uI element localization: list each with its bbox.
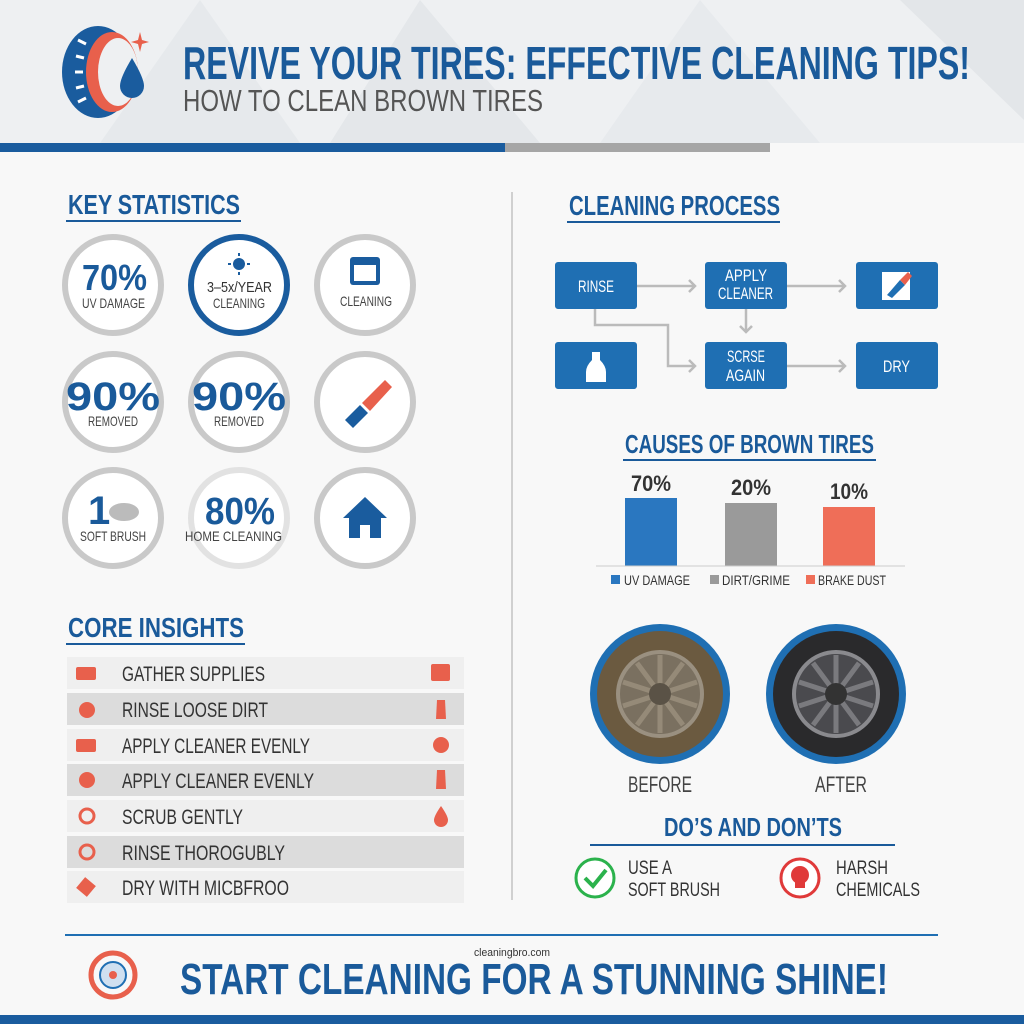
- flowchart: cleaning process: [555, 262, 938, 389]
- don't: harsh chemicals: [781, 858, 920, 901]
- panel: statistics circles: REMOVED: [88, 413, 138, 429]
- bar chart: causes: 70%: [631, 471, 671, 496]
- tire: after: AFTER: [815, 772, 867, 797]
- flowchart: cleaning process: APPLY: [725, 266, 767, 285]
- do: soft brush: [576, 858, 720, 901]
- legend: BRAKE DUST: [818, 572, 886, 588]
- panel: statistics circles: CLEANING: [213, 295, 265, 311]
- panel: insights list: SCRUB GENTLY: [122, 806, 243, 829]
- heading: do's and don'ts: DO’S AND DON’TS: [664, 812, 842, 842]
- don't: harsh chemicals: HARSH: [836, 858, 888, 879]
- panel: statistics circles: [65, 237, 413, 566]
- bar chart: causes: 20%: [731, 475, 771, 500]
- panel: statistics circles: UV DAMAGE: [82, 295, 145, 311]
- don't: harsh chemicals: CHEMICALS: [836, 880, 920, 901]
- panel: statistics circles: 80%: [205, 491, 275, 533]
- panel: statistics circles: HOME CLEANING: [185, 528, 282, 544]
- panel: insights list: DRY WITH MICBFROO: [122, 877, 289, 900]
- do: soft brush: SOFT BRUSH: [628, 880, 720, 901]
- panel: statistics circles: 3–5x/YEAR: [207, 279, 272, 296]
- icon: tire logo: [62, 26, 149, 118]
- panel: statistics circles: CLEANING: [340, 293, 392, 309]
- bar chart: causes: 10%: [830, 479, 868, 504]
- tire: before: BEFORE: [628, 772, 692, 797]
- bar chart: causes: [596, 471, 905, 588]
- panel: statistics circles: 90%: [192, 375, 286, 419]
- panel: insights list: APPLY CLEANER EVENLY: [122, 735, 310, 758]
- tire: before: [590, 624, 730, 797]
- icon: wheel: [91, 953, 135, 997]
- flowchart: cleaning process: DRY: [883, 357, 910, 376]
- panel: insights list: RINSE LOOSE DIRT: [122, 699, 268, 722]
- legend: DIRT/GRIME: [722, 572, 790, 588]
- panel: statistics circles: SOFT BRUSH: [80, 528, 146, 544]
- flowchart: cleaning process: CLEANER: [718, 284, 773, 303]
- panel: insights list: RINSE THOROGUBLY: [122, 842, 285, 865]
- legend: UV DAMAGE: [624, 572, 690, 588]
- heading: causes of brown tires: CAUSES OF BROWN TIRES: [625, 429, 874, 459]
- panel: insights list: GATHER SUPPLIES: [122, 663, 265, 686]
- flowchart: cleaning process: RINSE: [578, 277, 614, 296]
- footer: call to action: cleaningbro.com: [474, 947, 550, 959]
- panel: statistics circles: 90%: [66, 375, 160, 419]
- heading: core insights: CORE INSIGHTS: [68, 612, 244, 643]
- panel: insights list: APPLY CLEANER EVENLY: [122, 770, 314, 793]
- heading: key statistics: KEY STATISTICS: [68, 189, 240, 220]
- panel: statistics circles: 70%: [82, 257, 147, 298]
- flowchart: cleaning process: AGAIN: [726, 366, 765, 385]
- panel: insights list: [67, 657, 464, 903]
- panel: statistics circles: REMOVED: [214, 413, 264, 429]
- flowchart: cleaning process: SCRSE: [727, 347, 765, 366]
- tire: after: [766, 624, 906, 797]
- panel: statistics circles: 1: [88, 489, 110, 533]
- subtitle: HOW TO CLEAN BROWN TIRES: [183, 83, 543, 118]
- legend: [611, 572, 886, 588]
- heading: cleaning process: CLEANING PROCESS: [569, 190, 780, 221]
- do: soft brush: USE A: [628, 858, 672, 879]
